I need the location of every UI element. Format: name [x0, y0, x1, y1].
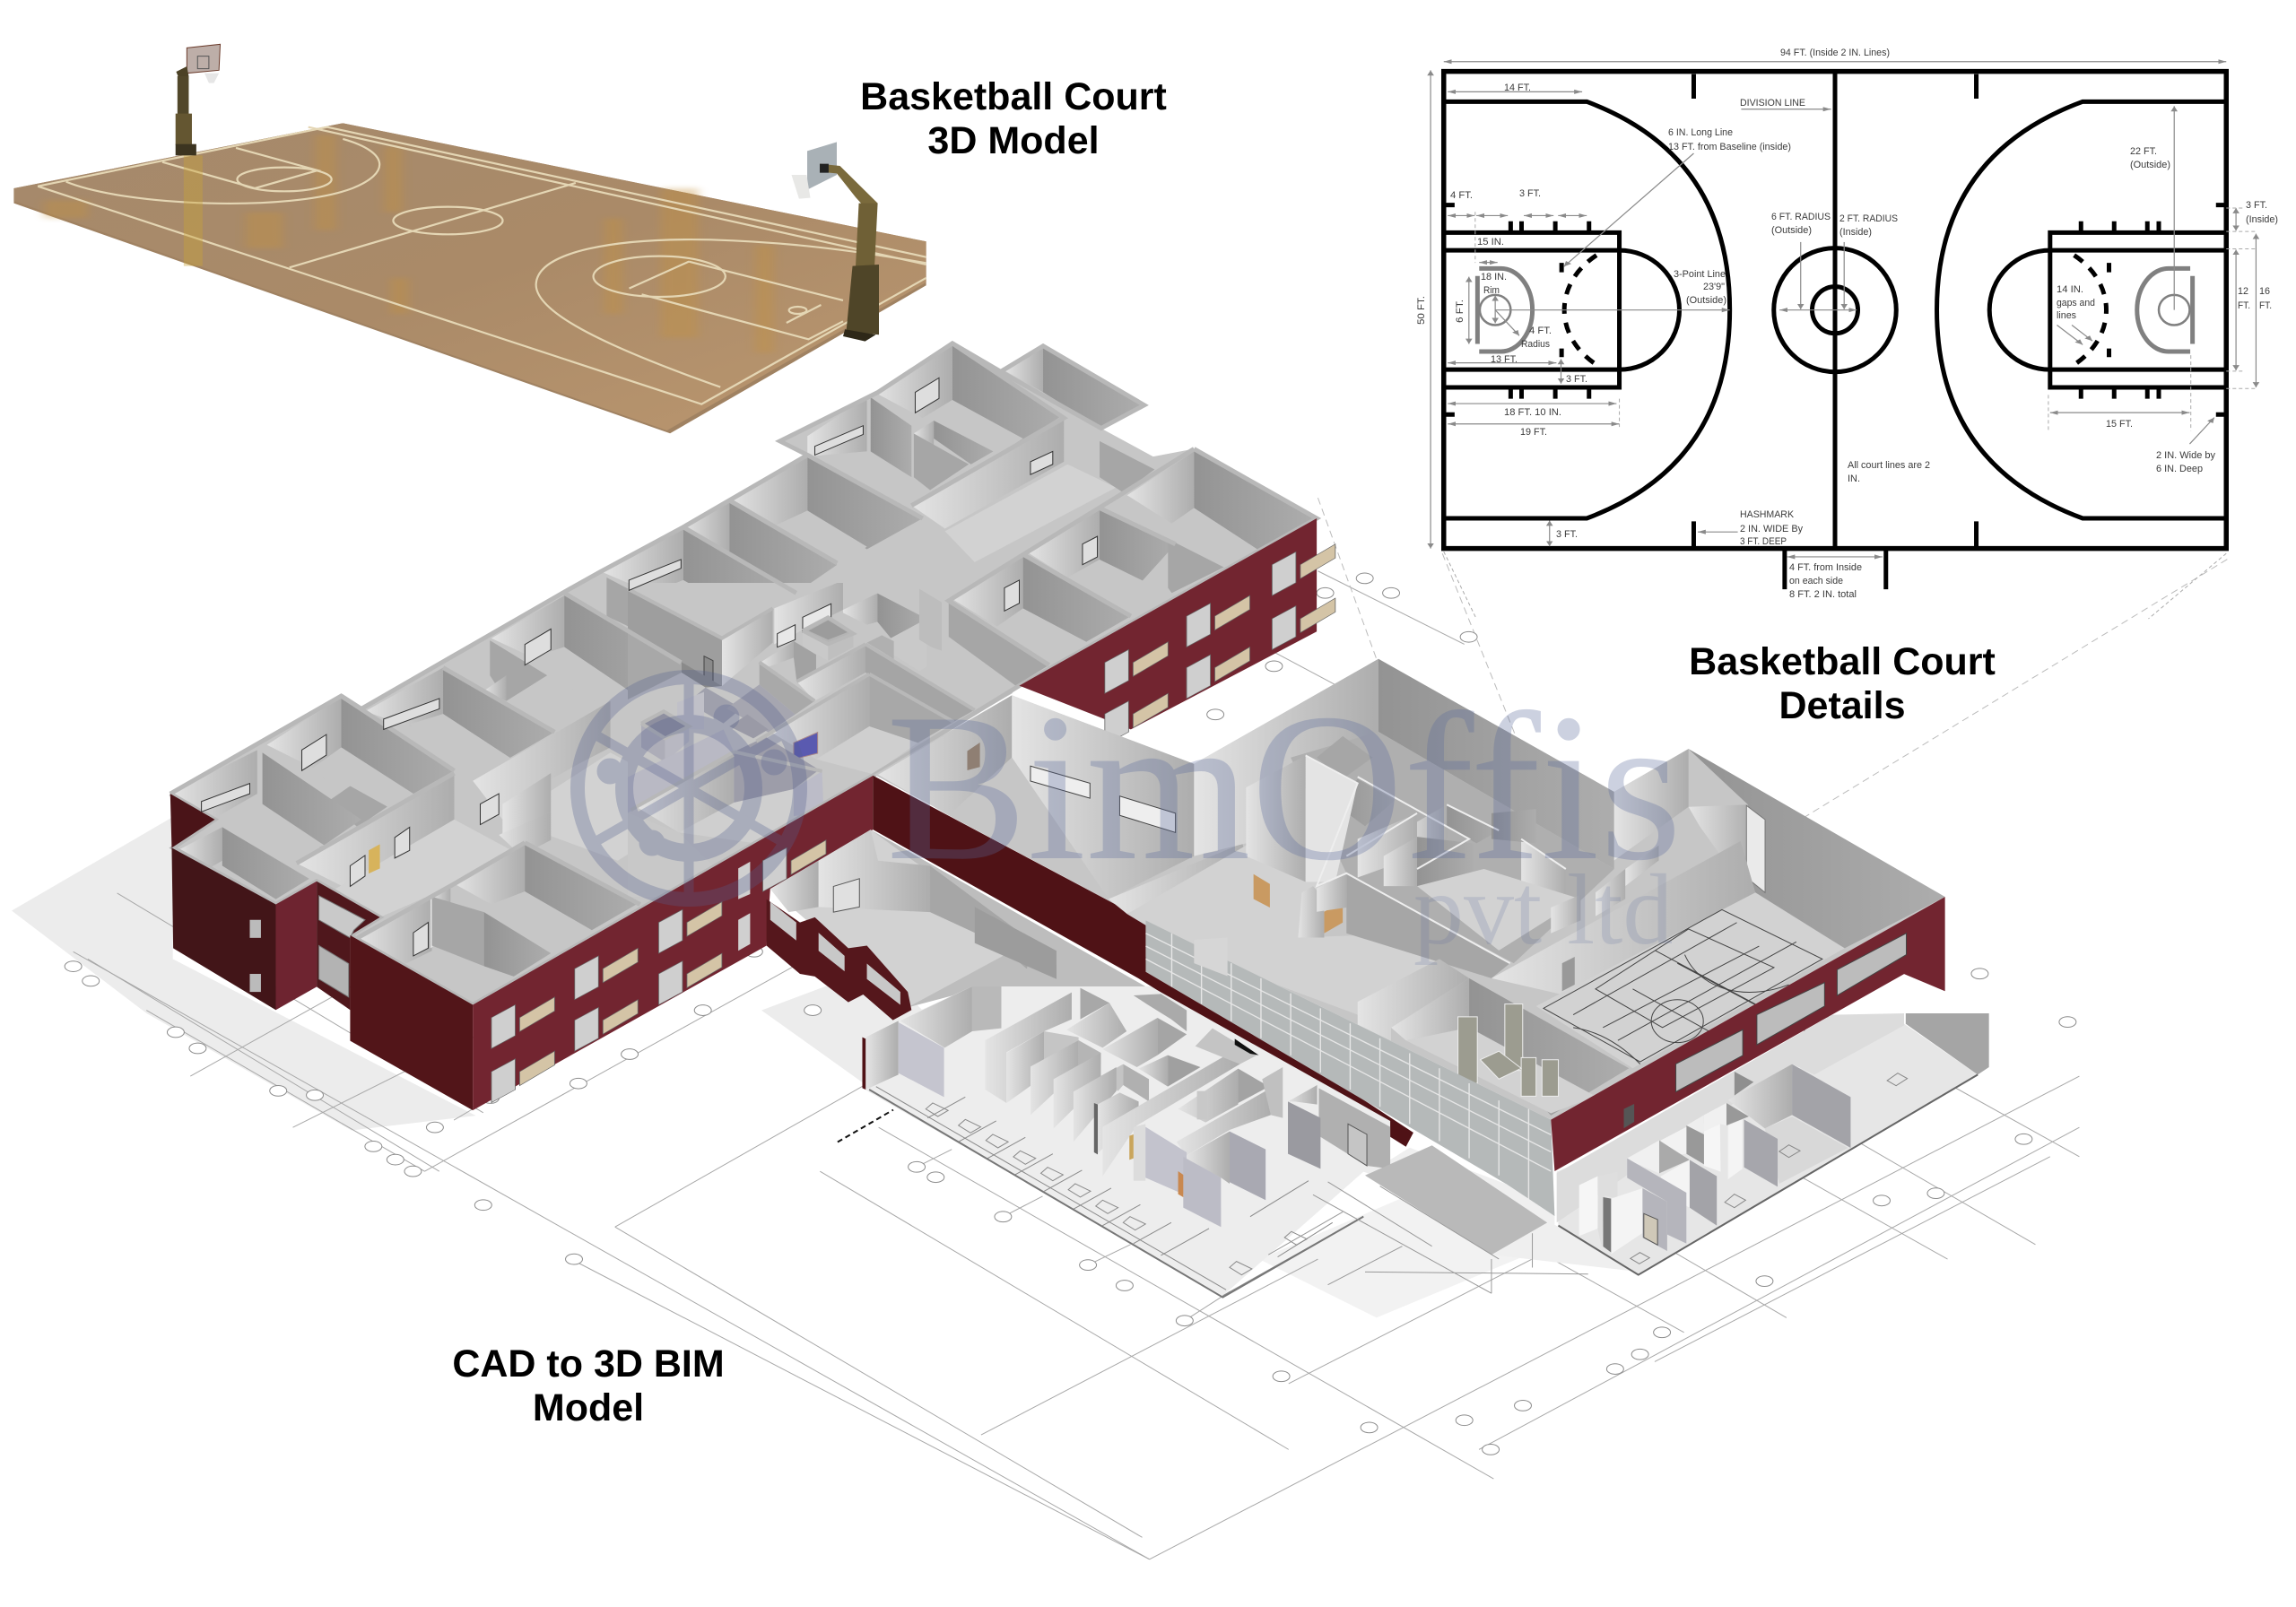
court drawing labels: 14 IN.: [2057, 284, 2083, 295]
court drawing labels: 2 IN. Wide by: [2156, 450, 2215, 461]
court drawing labels: (Outside): [1686, 295, 1726, 306]
BIM model: east wing: [873, 659, 1945, 1272]
court drawing labels: 3 FT.: [1519, 188, 1541, 199]
classroom floor plan plate: [862, 986, 1390, 1296]
court drawing labels: 4 FT.: [1529, 326, 1552, 336]
entrance court: [767, 830, 1152, 1021]
court drawing labels: 19 FT.: [1520, 427, 1547, 438]
south-east maroon facade: [170, 518, 1317, 1110]
annex plan marks: [1631, 1073, 1908, 1264]
court drawing labels: 6 IN. Long Line: [1668, 127, 1733, 138]
annex floor: [1557, 1024, 1978, 1275]
title: Basketball Court 3D Model: Basketball Court: [860, 75, 1167, 118]
wood floor slab: [13, 123, 926, 433]
title: Basketball Court Details: Details: [1779, 684, 1906, 727]
court drawing labels: 2 IN. WIDE By: [1740, 524, 1803, 534]
BIM model: south classrooms: [862, 986, 1390, 1298]
court outline and centre line: [1444, 72, 2226, 549]
north-east classroom: [949, 554, 1131, 686]
yellow door: [369, 844, 380, 873]
court drawing labels: 50 FT.: [1416, 296, 1427, 325]
court drawing labels: (Inside): [1839, 227, 1872, 238]
court drawing labels: lines: [2057, 310, 2076, 321]
entrance corner walls: [862, 986, 1001, 1097]
leader arrows: [1495, 106, 2214, 532]
wood floor surface: [13, 123, 926, 430]
north-east rooms: [683, 345, 1154, 593]
glass curtain wall: [1145, 920, 1554, 1216]
middle rooms: [760, 635, 975, 722]
court drawing labels: [1416, 48, 2278, 600]
logo globe: [578, 677, 800, 899]
court drawing labels: 22 FT.: [2130, 146, 2157, 157]
interior windows and doors: [202, 378, 1098, 956]
title: Basketball Court 3D Model: 3D Model: [927, 119, 1100, 162]
court drawing labels: 4 FT. from Inside: [1789, 562, 1862, 573]
court drawing labels: 6 FT.: [1455, 300, 1465, 323]
front room under watermark: [628, 737, 823, 897]
court drawing labels: 4 FT.: [1450, 190, 1473, 201]
court drawing labels: 18 FT. 10 IN.: [1504, 407, 1561, 418]
keys and free-throw circles: [1444, 205, 2226, 414]
court drawing labels: 6 FT. RADIUS: [1771, 212, 1831, 222]
partition walls: [1579, 1064, 1850, 1254]
court drawing labels: 23'9": [1703, 282, 1725, 292]
centre circles: [1774, 248, 1896, 589]
court drawing labels: (Outside): [2130, 160, 2170, 170]
entry plan area: [1365, 1148, 1640, 1272]
court drawing labels: (Outside): [1771, 225, 1812, 236]
mechanical room: [1358, 959, 1629, 1116]
court drawing labels: (Inside): [2246, 214, 2278, 225]
annex plan edge: [1558, 1074, 1978, 1275]
court drawing labels: Rim: [1483, 285, 1500, 296]
floor reflections: [44, 135, 774, 352]
east maroon facade: [1551, 897, 1945, 1171]
ground shadows: [12, 817, 1552, 1317]
court drawing labels: DIVISION LINE: [1740, 98, 1805, 109]
rear right rooms: [1288, 1085, 1390, 1168]
hoop and restricted areas: [1477, 268, 2193, 352]
BIM model: south-east annex: [1557, 1013, 1989, 1275]
south-east rooms: [358, 843, 637, 1003]
front block walls: [1129, 1124, 1265, 1227]
court drawing labels: 13 FT.: [1491, 354, 1518, 365]
dimension arrows: [1431, 62, 2256, 557]
court drawing labels: 3 FT.: [1566, 374, 1587, 385]
court drawing labels: 3 FT. DEEP: [1740, 536, 1787, 547]
central corridor: [297, 701, 707, 917]
upper corridor rooms: [603, 451, 1313, 670]
court drawing labels: IN.: [1848, 473, 1860, 484]
court drawing labels: on each side: [1789, 576, 1843, 586]
three-point lines: [1444, 101, 2226, 518]
BIM model: entry canopy: [1268, 1145, 1588, 1293]
court drawing labels: All court lines are 2: [1848, 460, 1930, 471]
court drawing labels: 94 FT. (Inside 2 IN. Lines): [1780, 48, 1890, 58]
court drawing labels: 18 IN.: [1481, 272, 1507, 282]
NBA court dimension drawing: [1431, 62, 2257, 619]
far pole reflection: [184, 155, 203, 266]
BIM model: north-west wing rooms: [170, 343, 1317, 1004]
west hall: [878, 695, 1246, 920]
court drawing labels: 15 IN.: [1477, 237, 1504, 248]
annex back wall: [1557, 1013, 1904, 1222]
gym room: [1492, 749, 1945, 1068]
court drawing labels: 6 IN. Deep: [2156, 464, 2203, 474]
CAD floor plan linework and grid bubbles: [12, 498, 2227, 1559]
3D basketball court model: [13, 44, 926, 433]
upper rooms: [628, 583, 1016, 710]
court drawing labels: 13 FT. from Baseline (inside): [1668, 142, 1791, 152]
company name: BimOffis: [886, 671, 1682, 905]
cluster wall tops: [628, 589, 975, 810]
BimOffis watermark: [578, 671, 1682, 966]
court drawing labels: gaps and: [2057, 298, 2095, 308]
court drawing labels: FT.: [2259, 300, 2272, 311]
company suffix: pvt ltd: [1413, 855, 1673, 966]
title: CAD to 3D BIM Model: Model: [533, 1386, 644, 1429]
court drawing labels: 2 FT. RADIUS: [1839, 213, 1898, 224]
cluster floor: [628, 583, 1016, 897]
dashed extension lines: [1444, 208, 2257, 619]
court drawing labels: 8 FT. 2 IN. total: [1789, 589, 1857, 600]
dark maroon spine wall: [873, 776, 1413, 1147]
title: Basketball Court Details: Basketball Court: [1689, 640, 1996, 683]
glazed room: [771, 674, 953, 774]
east wing plate: [874, 659, 1945, 1120]
inner rooms: [1102, 994, 1283, 1177]
court drawing labels: Radius: [1521, 339, 1550, 350]
grid bubbles: [65, 573, 2076, 1455]
gym floor drawing: [1544, 909, 1822, 1064]
right hoop: [791, 142, 879, 342]
wing floor plate: [170, 343, 1317, 1004]
court drawing labels: 14 FT.: [1504, 83, 1531, 93]
wall tops: [170, 343, 1317, 1004]
watermark-side closets: [628, 630, 796, 813]
court markings: [38, 127, 926, 404]
BIM model: central room cluster: [628, 583, 1016, 897]
thick plan edge: [869, 1090, 1363, 1298]
central rooms and closets: [1127, 659, 1658, 1015]
court drawing labels: 3 FT.: [1556, 529, 1578, 540]
court drawing labels: 12: [2238, 286, 2248, 297]
classroom plan linework: [869, 1087, 1363, 1298]
court drawing labels: 3-Point Line: [1674, 269, 1726, 280]
court drawing labels: HASHMARK: [1740, 509, 1795, 520]
court drawing labels: 15 FT.: [2106, 419, 2133, 430]
court drawing labels: 3 FT.: [2246, 200, 2267, 211]
court drawing labels: 16: [2259, 286, 2270, 297]
court drawing labels: FT.: [2238, 300, 2250, 311]
left hoop: [176, 44, 221, 155]
dashed projection lines from the court drawing: [1318, 498, 2227, 864]
far room wall: [1906, 1013, 1989, 1074]
BIM model: north-west wing facades: [170, 343, 1335, 1110]
south-west rooms: [170, 595, 681, 899]
canopy plan linework: [1268, 1182, 1588, 1293]
parallel partition walls: [985, 988, 1149, 1154]
maroon facade windows: [491, 544, 1335, 1103]
title: CAD to 3D BIM Model: CAD to 3D BIM: [452, 1342, 725, 1385]
